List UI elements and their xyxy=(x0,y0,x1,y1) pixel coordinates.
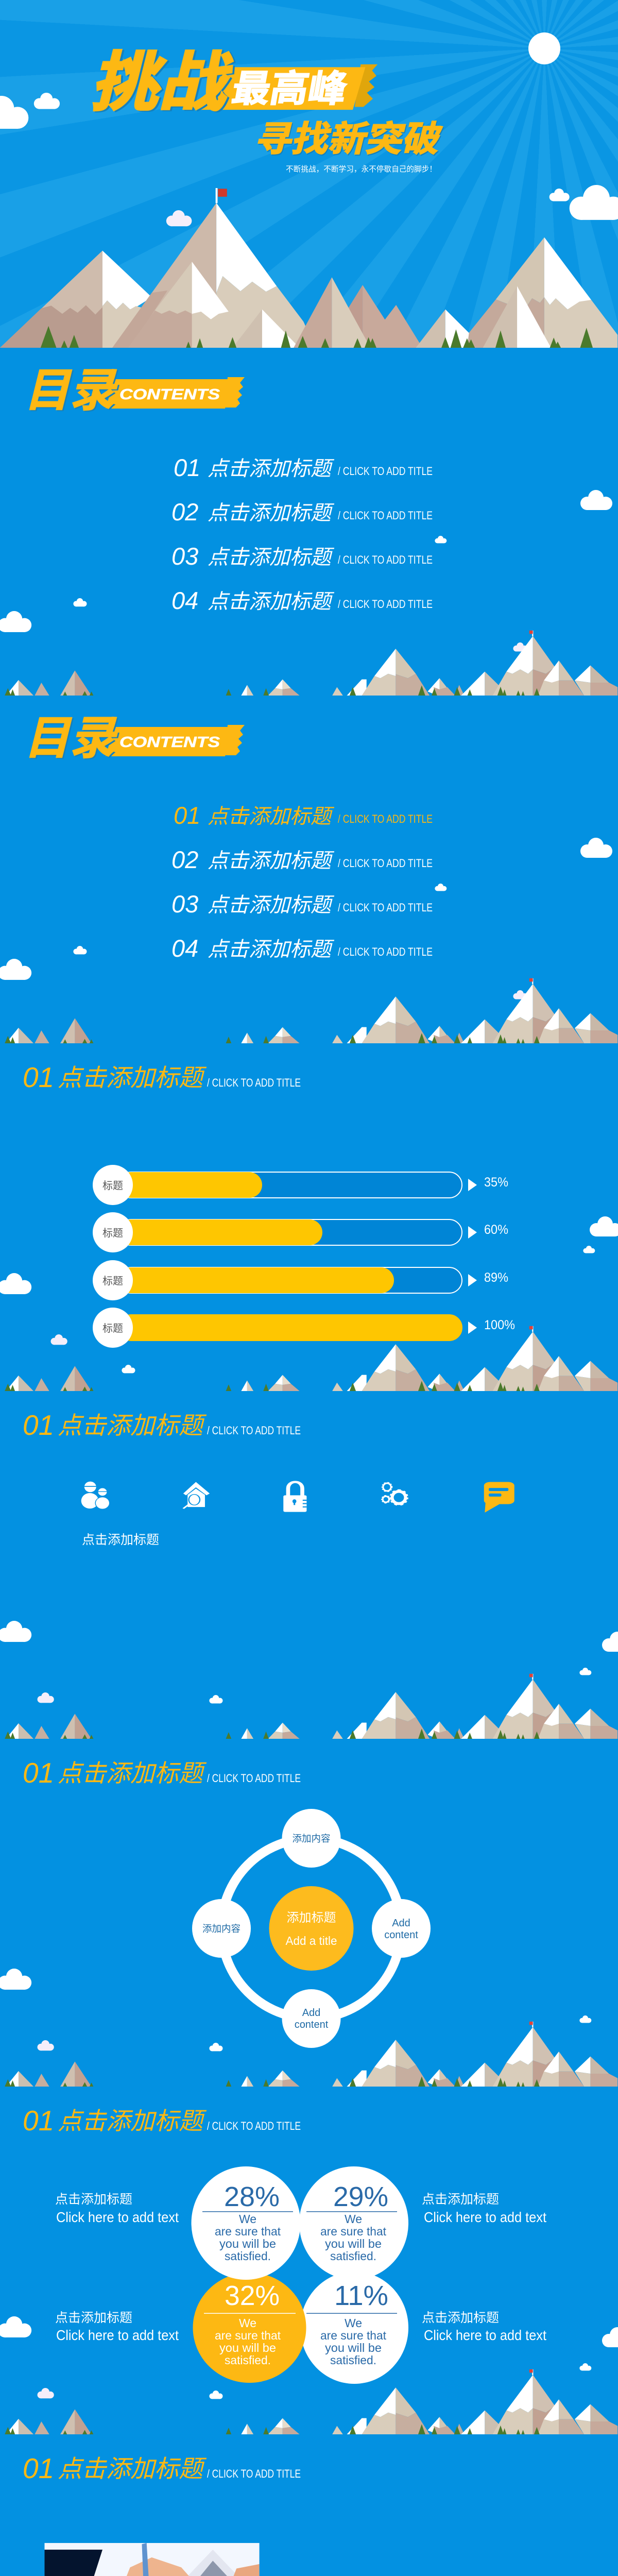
circle 28%: satisfied. xyxy=(225,2249,271,2263)
label lower right: Click here to add text xyxy=(424,2327,546,2343)
footer mountains xyxy=(5,2369,617,2434)
contents item 04: / CLICK TO ADD TITLE xyxy=(338,945,433,958)
cloud small right xyxy=(579,2363,591,2370)
label upper right: 点击添加标题 xyxy=(422,2192,499,2207)
footer mountains xyxy=(5,978,617,1043)
slide title: / CLICK TO ADD TITLE xyxy=(207,2120,301,2132)
cloud pink left xyxy=(38,2388,54,2398)
mountain range with flag and trees xyxy=(0,188,617,348)
cloud right xyxy=(590,1216,618,1236)
contents item 01 highlighted xyxy=(174,802,433,829)
contents ribbon xyxy=(106,725,245,756)
heading: CONTENTS: CONTENTS xyxy=(119,386,220,403)
circle 11%: satisfied. xyxy=(330,2353,376,2367)
bar 60% xyxy=(93,1212,508,1252)
photo: business hands with document and pens xyxy=(44,2543,260,2576)
node right xyxy=(372,1899,431,1958)
contents item 01: / CLICK TO ADD TITLE xyxy=(338,465,433,478)
bar 60%: 60% xyxy=(484,1223,508,1237)
contents item 02: / CLICK TO ADD TITLE xyxy=(338,509,433,522)
contents item 03: 03 xyxy=(171,543,198,570)
slide title: 点击添加标题 xyxy=(58,1064,207,1091)
cloud right xyxy=(580,838,612,858)
label lower left: 点击添加标题 xyxy=(55,2311,132,2325)
circle 28%: 28% xyxy=(224,2181,280,2212)
circle 11%: are sure that xyxy=(320,2329,387,2342)
cloud by the summit xyxy=(166,210,192,226)
circle 32% xyxy=(193,2273,306,2383)
title: 最高峰: 最高峰 xyxy=(229,68,350,110)
node bottom: content xyxy=(295,2019,329,2030)
slide title xyxy=(23,2105,301,2137)
bar 100%: 100% xyxy=(484,1318,515,1332)
cloud small middle xyxy=(209,2391,222,2399)
contents item 04: 点击添加标题 xyxy=(208,590,335,613)
contents item 03: 点击添加标题 xyxy=(208,894,335,917)
slide title: 点击添加标题 xyxy=(58,2455,207,2482)
label upper left xyxy=(55,2192,179,2225)
cloud right large xyxy=(570,185,618,220)
circle 11% xyxy=(300,2272,408,2384)
footer mountains xyxy=(5,2022,617,2087)
slide title xyxy=(23,1757,301,1789)
contents item 03 xyxy=(171,543,433,570)
slide title: / CLICK TO ADD TITLE xyxy=(207,1772,301,1785)
slide title: 01 xyxy=(23,2452,54,2484)
slide title: 01 xyxy=(23,1409,54,1441)
panel: contents slide xyxy=(0,348,618,696)
panel: four percentage circles slide xyxy=(0,2087,618,2434)
cloud right xyxy=(580,490,612,510)
slide title: 点击添加标题 xyxy=(58,2107,207,2134)
slide title: / CLICK TO ADD TITLE xyxy=(207,1076,301,1089)
panel: progress bars slide xyxy=(0,1043,618,1391)
cloud by the peak xyxy=(513,642,527,652)
cloud right xyxy=(602,2327,618,2347)
contents item 02 xyxy=(171,846,433,873)
label upper right: Click here to add text xyxy=(424,2209,546,2225)
label lower right xyxy=(422,2311,546,2343)
cloud small bottom xyxy=(122,1365,135,1373)
bar 35%: 35% xyxy=(484,1175,508,1190)
cloud left xyxy=(0,959,31,980)
contents item 02 xyxy=(171,498,433,526)
centre circle: 添加标题 xyxy=(286,1911,336,1925)
heading: 目录: 目录 xyxy=(22,713,125,764)
cloud pink left xyxy=(38,2040,54,2050)
label lower left: Click here to add text xyxy=(56,2327,179,2343)
contents item 01: 点击添加标题 xyxy=(208,457,335,480)
contents item 03: 03 xyxy=(171,890,198,918)
contents item 03 xyxy=(171,890,433,918)
circle 32%: satisfied. xyxy=(225,2353,271,2367)
cloud small middle xyxy=(209,2043,222,2051)
circle 32%: We xyxy=(239,2316,256,2330)
circle 29%: you will be xyxy=(325,2237,382,2250)
cloud left xyxy=(0,1273,31,1294)
bar 60%: 标题 xyxy=(102,1227,123,1239)
node top xyxy=(282,1809,341,1868)
bar 100%: 标题 xyxy=(102,1323,123,1334)
circle 32%: are sure that xyxy=(215,2329,281,2342)
cloud left small xyxy=(34,93,60,109)
cloud right small xyxy=(579,2015,591,2023)
cloud small right xyxy=(583,1246,595,1253)
slide title: / CLICK TO ADD TITLE xyxy=(207,2467,301,2480)
cloud small left xyxy=(73,946,87,954)
node right: Add xyxy=(392,1918,410,1929)
panel: icons slide xyxy=(0,1391,618,1739)
circle 11%: you will be xyxy=(325,2341,382,2354)
contents item 03: 点击添加标题 xyxy=(208,546,335,569)
label upper left: Click here to add text xyxy=(56,2209,179,2225)
cloud left xyxy=(0,2316,31,2337)
cloud pink left xyxy=(38,1692,54,1703)
centre circle xyxy=(269,1886,353,1971)
slide title xyxy=(23,2452,301,2484)
contents item 04: 04 xyxy=(171,587,198,614)
circle 29% xyxy=(299,2166,408,2280)
bar 35%: 标题 xyxy=(102,1180,123,1192)
contents item 02: 02 xyxy=(171,846,198,873)
cloud small right xyxy=(579,1668,591,1675)
cloud left large xyxy=(0,96,28,129)
cloud small middle xyxy=(435,536,447,543)
contents item 04 xyxy=(171,935,433,962)
sun xyxy=(528,32,560,64)
text label: 点击添加标题 xyxy=(82,1533,159,1547)
ring xyxy=(221,1838,401,2019)
label lower left xyxy=(55,2311,179,2343)
contents item 01 highlighted: / CLICK TO ADD TITLE xyxy=(338,812,433,825)
footer mountains xyxy=(5,1674,617,1739)
cloud left xyxy=(0,611,31,632)
node bottom: Add xyxy=(302,2007,320,2019)
circle 29%: are sure that xyxy=(320,2225,387,2238)
node bottom xyxy=(282,1989,341,2048)
contents item 02: 点击添加标题 xyxy=(208,850,335,872)
contents ribbon xyxy=(106,377,245,409)
slide title xyxy=(23,1409,301,1441)
panel: cover slide xyxy=(0,0,618,348)
bar 35% xyxy=(93,1165,508,1205)
node left xyxy=(192,1899,251,1958)
contents item 01 xyxy=(174,454,433,481)
contents item 03: / CLICK TO ADD TITLE xyxy=(338,901,433,914)
cloud small middle xyxy=(209,1695,222,1703)
slide title: 01 xyxy=(23,2105,54,2137)
contents item 02: / CLICK TO ADD TITLE xyxy=(338,857,433,870)
circle 29%: 29% xyxy=(333,2181,388,2212)
subtitle: 寻找新突破: 寻找新突破 xyxy=(252,119,446,159)
circle 28%: you will be xyxy=(219,2237,276,2250)
circle 32%: 32% xyxy=(225,2280,280,2311)
bar 100% xyxy=(93,1308,515,1348)
icon: people xyxy=(81,1482,110,1509)
icon: padlock xyxy=(283,1482,306,1512)
icon: gears xyxy=(382,1482,407,1505)
slide title: / CLICK TO ADD TITLE xyxy=(207,1424,301,1437)
circle 28% xyxy=(192,2166,301,2280)
contents item 04: 点击添加标题 xyxy=(208,938,335,961)
heading: 目录: 目录 xyxy=(22,365,125,416)
footer mountains xyxy=(5,631,617,696)
circle 11%: We xyxy=(345,2316,362,2330)
contents item 04 xyxy=(171,587,433,614)
node top: 添加内容 xyxy=(292,1833,331,1844)
cloud left xyxy=(0,1969,31,1990)
circle 29%: satisfied. xyxy=(330,2249,376,2263)
icon: chat bubble xyxy=(484,1482,514,1513)
contents item 04: 04 xyxy=(171,935,198,962)
circle 32%: you will be xyxy=(219,2341,276,2354)
cloud right xyxy=(602,1632,618,1652)
cloud by the peak xyxy=(513,990,527,999)
slide title: 点击添加标题 xyxy=(58,1759,207,1787)
label upper left: 点击添加标题 xyxy=(55,2192,132,2207)
contents item 01 highlighted: 点击添加标题 xyxy=(208,805,335,828)
circle 28%: We xyxy=(239,2212,256,2226)
contents item 02: 02 xyxy=(171,498,198,526)
cloud right small xyxy=(550,189,570,201)
bar 89%: 89% xyxy=(484,1270,508,1285)
contents item 01: 01 xyxy=(174,454,200,481)
label lower right: 点击添加标题 xyxy=(422,2311,499,2325)
panel: ring diagram slide xyxy=(0,1739,618,2087)
ribbon banner xyxy=(198,64,377,110)
slide title: 点击添加标题 xyxy=(58,1412,207,1439)
circle 11%: 11% xyxy=(334,2280,388,2311)
slide title: 01 xyxy=(23,1061,54,1093)
contents item 01 highlighted: 01 xyxy=(174,802,200,829)
bar 89%: 标题 xyxy=(102,1275,123,1287)
node left: 添加内容 xyxy=(202,1923,241,1934)
slide title: 01 xyxy=(23,1757,54,1789)
contents item 02: 点击添加标题 xyxy=(208,502,335,524)
panel: photo slide xyxy=(0,2434,618,2576)
slide title xyxy=(23,1061,301,1093)
title: 挑战: 挑战 xyxy=(87,46,240,118)
node right: content xyxy=(384,1929,418,1941)
cloud small left xyxy=(73,598,87,606)
footer mountains xyxy=(5,1326,617,1391)
panel: contents slide with first item highlighted xyxy=(0,696,618,1043)
circle 28%: are sure that xyxy=(215,2225,281,2238)
cloud left xyxy=(0,1621,31,1642)
heading: CONTENTS: CONTENTS xyxy=(119,734,220,751)
cloud pink left xyxy=(51,1334,67,1345)
centre circle: Add a title xyxy=(285,1934,337,1947)
circle 29%: We xyxy=(345,2212,362,2226)
label upper right xyxy=(422,2192,546,2225)
contents item 03: / CLICK TO ADD TITLE xyxy=(338,553,433,566)
bar 89% xyxy=(93,1260,508,1300)
icon: house with magnifier xyxy=(183,1482,210,1509)
tagline: 不断挑战，不断学习，永不停歇自己的脚步！ xyxy=(286,165,437,174)
cloud small middle xyxy=(435,884,447,891)
contents item 04: / CLICK TO ADD TITLE xyxy=(338,598,433,611)
